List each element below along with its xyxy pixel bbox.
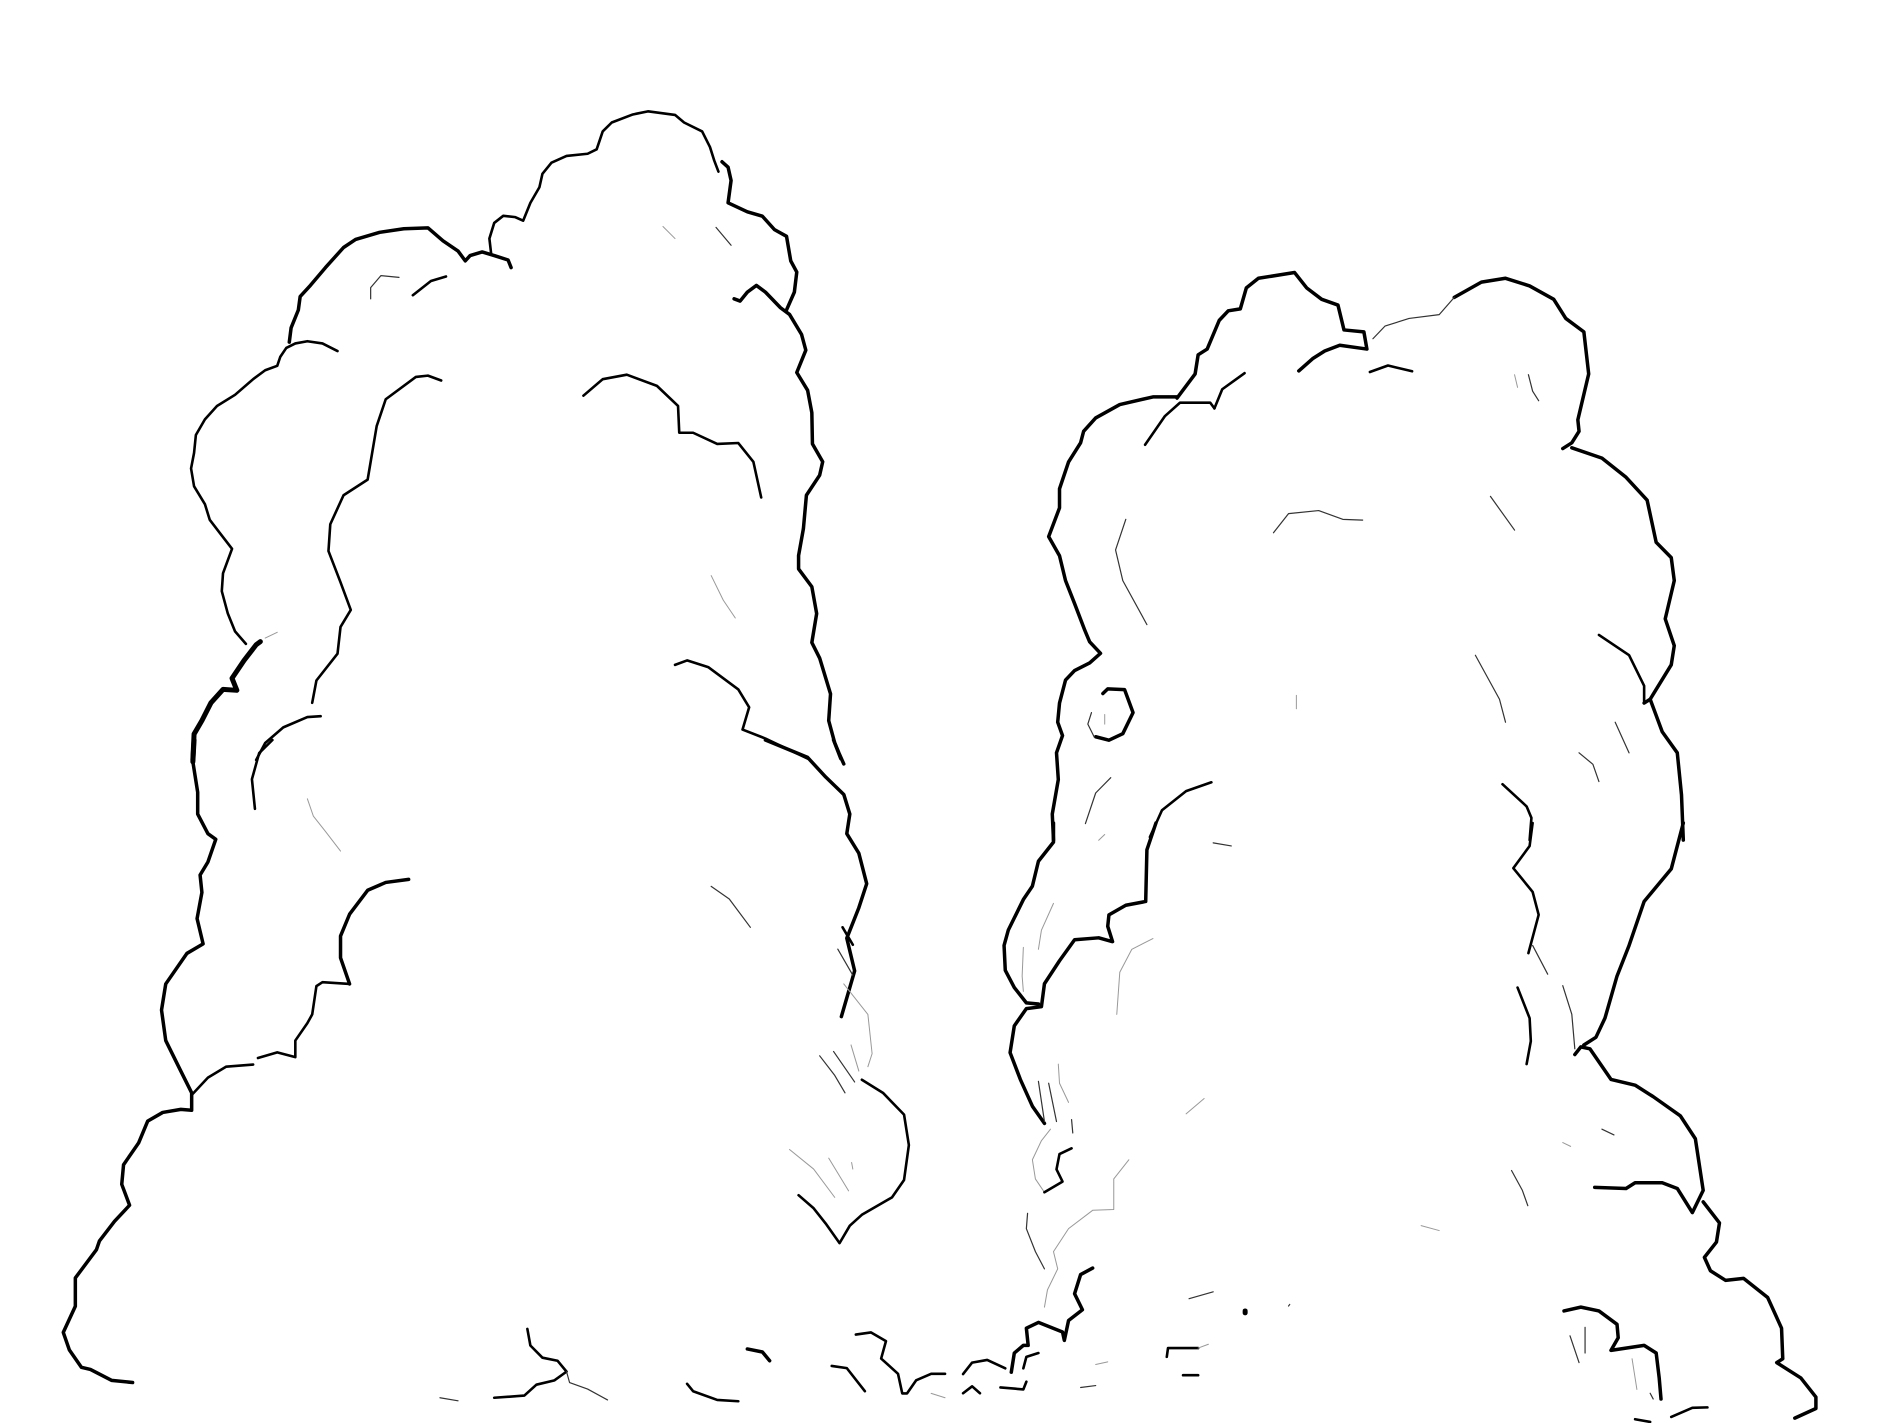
left cloud <box>63 111 945 1401</box>
left cloud: upper section <box>191 111 841 760</box>
right cloud <box>963 273 1816 1422</box>
icon: small spiral puff <box>1088 689 1133 740</box>
right cloud: upper section <box>1049 273 1683 840</box>
right cloud: lower section <box>963 823 1816 1422</box>
left cloud: lower section <box>63 740 945 1401</box>
